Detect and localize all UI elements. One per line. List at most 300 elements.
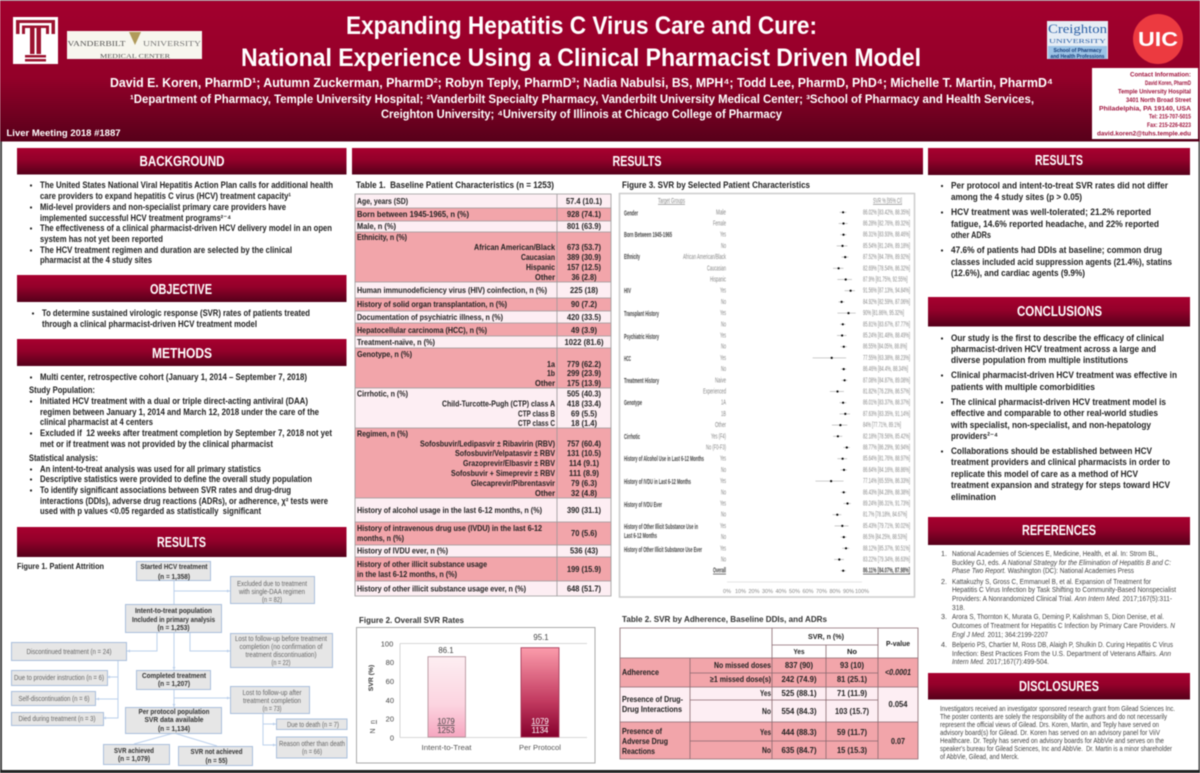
table 1: baseline patient characteristics: Hispanic [526,263,555,272]
icon: UIC logo [1133,14,1183,64]
table 2: SVR by adherence, DDIs, ADRs: 71 (11.9) [837,689,867,698]
table 2: SVR by adherence, DDIs, ADRs: 242 (74.9) [782,675,817,684]
forest plot: SVR by patient characteristics: Yes [720,545,726,552]
bar: per protocol: 1079 [531,717,549,726]
box: per protocol population: (n = 1,134) [158,724,191,733]
forest plot: SVR by patient characteristics: Transplant History [624,309,659,318]
axis: 90% [843,589,854,595]
forest plot: SVR by patient characteristics: 86.5% [84.25%, 88.53%] [863,534,907,541]
axis: 20% [748,589,760,595]
panel: references: 318. [952,603,965,612]
box: completed treatment [136,670,210,690]
table 2: SVR by adherence, DDIs, ADRs: <0.0001 [885,668,911,677]
table 1: baseline patient characteristics: CTP class C [518,419,555,428]
box: excluded [230,576,314,604]
box: provider instruction [12,670,108,686]
forest plot: SVR by patient characteristics: 84.92% [82.59%, 87.06%] [863,299,910,306]
panel: results right: HCV treatment was well-tolerated; 21.2% reported [951,207,1151,218]
contact information box [1092,68,1198,139]
table 2: SVR by adherence, DDIs, ADRs: Presence of Drug- [622,695,683,704]
panel: methods: interactions (DDIs), adverse drug reactions (ADRs), or adherence, χ² tests were [40,496,328,506]
table 1: baseline patient characteristics: 299 (23.9) [567,369,601,378]
bar: per protocol [519,633,561,752]
table 1: baseline patient characteristics: 79 (6.3) [571,479,597,488]
bar chart: overall SVR rates: n [370,720,377,724]
bar chart: overall SVR rates: 60 [386,677,394,686]
bar chart: overall SVR rates: N [370,728,377,734]
forest plot: SVR by patient characteristics: African American/Black [683,254,726,261]
forest plot: SVR by patient characteristics: Yes [720,355,726,362]
box: intent-to-treat population: (n = 1,253) [158,623,190,632]
forest plot: SVR by patient characteristics: History of Other Illicit Substance Use Ever [624,545,702,554]
bar: intent-to-treat [422,646,472,752]
table 1: baseline patient characteristics: Caucasian [521,253,555,262]
forest plot: SVR by patient characteristics: 87.63% [83.35%, 91.14%] [863,411,910,418]
table 2: SVR by adherence, DDIs, ADRs: Presence of [622,727,662,736]
forest plot: SVR by patient characteristics: No [721,299,726,306]
box: excluded: with single-DAA regimen [238,587,305,596]
table 1: baseline patient characteristics: 90 (7.2) [571,300,597,309]
panel: conclusions: providers²⁻⁴ [951,431,998,442]
forest plot: SVR by patient characteristics: Experienced [703,388,726,396]
table 1: baseline patient characteristics: 18 (1.4) [571,419,597,428]
panel: methods: Excluded if 12 weeks after treatment completion by September 7, 2018 not yet [40,428,332,438]
forest plot: SVR by patient characteristics: 1B [721,411,726,418]
table 2: SVR by adherence, DDIs, ADRs: Yes [760,689,771,698]
table 1: baseline patient characteristics: Glecaprevir/Pibrentasvir [471,479,556,488]
panel: disclosures: of AbbVie, Gilead, and Merck. [940,752,1019,761]
panel: references: REFERENCES [1022,523,1096,539]
table 2: SVR by adherence, DDIs, ADRs: ≥1 missed dose(s) [710,675,771,684]
forest plot: SVR by patient characteristics: Ethnicity [624,252,640,261]
bar chart: overall SVR rates: SVR (%) [368,665,375,691]
bar: per protocol: 1134 [532,726,549,735]
box: due to death [276,719,347,730]
forest plot: SVR by patient characteristics: 86.11% [84.07%, 87.98%] [863,566,910,575]
panel: disclosures: Healthcare. Dr. Teply has served on advisory boards for AbbVie and serves on the [940,736,1164,745]
panel: references: Providers: A Nonrandomized Clinical Trial. Ann Intern Med. 2017;167(5):311- [952,594,1173,603]
table 1: baseline patient characteristics: 157 (12.5) [567,263,601,272]
table 2: SVR by adherence, DDIs, ADRs: 444 (88.3) [782,728,817,737]
box: lost before completion: Lost to follow-up before treatment [235,634,327,643]
panel: results right [928,148,1190,279]
forest plot: SVR by patient characteristics: Hispanic [710,276,726,284]
forest plot: SVR by patient characteristics: 86.46% [84.4%, 88.34%] [863,366,908,373]
panel: references: Phase Two Report. Washington (DC): National Academies Press [952,566,1134,575]
panel: conclusions: with specialist, non-specialist, and non-hepatology [950,420,1152,431]
table 1: baseline patient characteristics: Sofosbuvir/Ledipasvir ± Ribavirin (RBV) [420,440,555,448]
table 1: baseline patient characteristics: 57.4 (10.1) [566,197,602,206]
axis: 50% [789,589,800,595]
box: per protocol population [126,707,222,734]
panel: methods: Multi center, retrospective cohort (January 1, 2014 – September 7, 2018) [40,372,307,382]
forest plot: SVR by patient characteristics: HIV [624,286,631,295]
box: SVR achieved [104,744,170,764]
panel: references: Kattakuzhy S, Gross C, Emmanuel B, et al. Expansion of Treatment for [952,577,1152,586]
panel: references: Buckley GJ, eds. A National Strategy for the Elimination of Hepatitis B and C: [952,558,1171,567]
forest plot: SVR by patient characteristics: Cirrhotic [624,432,640,441]
box: started treatment: Started HCV treatment [140,562,208,571]
icon: Vanderbilt University Medical Center logo: VANDERBILT [68,39,126,48]
table 2: SVR by adherence, DDIs, ADRs: SVR, n (%) [808,632,844,641]
table 1: baseline patient characteristics: Other [535,273,556,282]
forest plot: SVR by patient characteristics: Yes [720,310,726,317]
forest plot: SVR by patient characteristics: No (F0-F3) [706,444,726,452]
table 2: SVR by adherence, DDIs, ADRs: 93 (10) [840,661,864,670]
title [241,12,921,72]
panel: methods: met or if treatment was not provided by the clinical pharmacist [40,439,273,449]
panel: conclusions: treatment providers and clinical pharmacists in order to [951,457,1170,468]
axis [723,582,869,595]
contact information box: Fax: 215-226-8223 [1147,122,1191,129]
box: SVR not achieved: (n = 55) [206,756,228,765]
forest plot: SVR by patient characteristics: No [721,489,726,496]
forest plot: SVR by patient characteristics: Yes (F4) [711,433,726,440]
panel: results center [352,148,923,763]
bar chart: overall SVR rates: 100 [381,640,393,648]
table 1: baseline patient characteristics: History of intravenous drug use (IVDU) in the last 6-12 [357,524,542,533]
title: Expanding Hepatitis C Virus Care and Cure: [346,12,817,40]
bar: per protocol: 95.1 [533,633,549,642]
table 2: SVR by adherence, DDIs, ADRs: No [762,707,771,716]
bar: intent-to-treat: 1079 [437,717,455,726]
panel: disclosures: represent the official views of Gilead. Drs. Koren, Martin, and Teply have served on [940,720,1159,729]
panel: background: system has not yet been reported [40,234,163,244]
box: lost after completion [230,686,310,714]
table 1: baseline patient characteristics: History of IVDU ever, n (%) [357,546,448,556]
bar: intent-to-treat: Intent-to-Treat [422,743,472,752]
forest plot: SVR by patient characteristics: 88.77% [86.29%, 90.94%] [863,444,910,452]
axis: 80% [829,589,841,595]
heading: figure 1: Figure 1. Patient Attrition [17,561,104,571]
panel: methods: An intent-to-treat analysis was used for all primary statistics [40,464,261,474]
panel: objective: To determine sustained virologic response (SVR) rates of patients treated [42,308,310,318]
table 1: baseline patient characteristics: 69 (5.5) [571,410,597,418]
forest plot: SVR by patient characteristics: Male [716,209,726,216]
table 1: baseline patient characteristics: 175 (13.9) [567,379,601,388]
box: SVR not achieved [178,746,252,766]
icon: Creighton University logo [1047,21,1108,60]
forest plot: SVR by patient characteristics: Yes [720,288,726,295]
box: died: Died during treatment (n = 3) [18,714,96,723]
forest plot: SVR by patient characteristics: No [721,556,726,564]
forest plot: SVR by patient characteristics: 86.43% [84.28%, 88.38%] [863,489,910,496]
forest plot: SVR by patient characteristics: 77.55% [63.38%, 88.23%] [863,355,910,362]
authors and affiliations [110,75,1053,121]
box: lost before completion: (n = 22) [272,658,290,667]
flowchart: patient attrition [12,562,347,766]
table 1: baseline patient characteristics: 757 (60.4) [567,440,601,448]
table 1: baseline patient characteristics: Child-Turcotte-Pugh (CTP) class A [442,400,555,408]
table 2: SVR by adherence, DDIs, ADRs [620,628,918,759]
box: SVR achieved: SVR achieved [114,746,154,755]
table 1: baseline patient characteristics: Treatment-naïve, n (%) [357,338,435,347]
table 2: SVR by adherence, DDIs, ADRs: Yes [760,728,771,737]
table 2: SVR by adherence, DDIs, ADRs: 15 (15.3) [837,746,867,755]
panel: methods: To identify significant associations between SVR rates and drug-drug [40,485,291,495]
forest plot: SVR by patient characteristics: Last 6-12 Months [624,531,657,540]
panel: references: Infection: Best Practices From the U.S. Department of Veterans Affairs. Ann [952,649,1171,658]
box: provider instruction: Due to provider instruction (n = 6) [14,673,104,682]
panel: methods: Descriptive statistics were provided to define the overall study population [40,474,312,484]
forest plot: SVR by patient characteristics: SVR % [95% CI] [873,198,902,205]
heading: table 1: Table 1. Baseline Patient Characteristics (n = 1253) [356,180,554,190]
table 2: SVR by adherence, DDIs, ADRs: 59 (11.7) [837,728,867,737]
table 1: baseline patient characteristics: 801 (63.9) [567,222,601,231]
panel: methods: METHODS [152,346,212,362]
forest plot: SVR by patient characteristics: No [721,243,726,250]
icon: UIC logo: UIC [1138,29,1178,51]
panel: results right: fatigue, 14.6% reported headache, and 22% reported [951,219,1159,230]
table 2: SVR by adherence, DDIs, ADRs: Reactions [622,747,655,756]
forest plot: SVR by patient characteristics: 88.12% [85.37%, 90.51%] [863,545,910,552]
panel: methods: Statistical analysis: [29,453,98,463]
icon: Creighton University logo: Creighton [1048,21,1108,36]
table 1: baseline patient characteristics: 1a [547,360,555,369]
authors and affiliations: ¹Department of Pharmacy, Temple University Hospital; ²Vanderbilt Specialty Pharmacy, Vanderbilt University Medical Center; ³School of Pharmacy and Health Services, [130,94,1034,106]
box: per protocol population: Per protocol population [138,707,210,716]
panel: conclusions: replicate this model of care as a method of HCV [951,469,1139,480]
table 1: baseline patient characteristics: 49 (3.9) [571,326,597,335]
meeting tag: Liver Meeting 2018 #1887 [6,128,121,138]
box: reason other than death [276,737,347,758]
forest plot: SVR by patient characteristics: Treatment History [624,376,659,385]
axis: 10% [735,589,746,595]
panel: results right: Per protocol and intent-to-treat SVR rates did not differ [951,181,1168,192]
table 1: baseline patient characteristics: Hepatocellular carcinoma (HCC), n (%) [357,326,487,335]
bar chart: overall SVR rates [356,628,595,763]
table 1: baseline patient characteristics: Ethnicity, n (%) [357,233,407,242]
panel: references: Intern Med. 2017;167(7):499-504. [952,657,1049,666]
table 1: baseline patient characteristics: 418 (33.4) [567,400,601,408]
panel: disclosures [928,673,1190,761]
table 1: baseline patient characteristics: 928 (74.1) [567,210,601,219]
heading: table 2: Table 2. SVR by Adherence, Baseline DDIs, and ADRs [622,614,827,624]
panel: results right: (12.6%), and cardiac agents (9.9%) [951,268,1085,279]
panel: conclusions: diverse population from multiple institutions [951,355,1128,366]
authors and affiliations: Creighton University; ⁴University of Illinois at Chicago College of Pharmacy [381,109,783,121]
forest plot: SVR by patient characteristics: No [721,321,726,328]
table 2: SVR by adherence, DDIs, ADRs: 103 (15.7) [835,707,869,716]
forest plot: SVR by patient characteristics: 90% [81.86%, 95.32%] [863,310,904,317]
table 1: baseline patient characteristics: History of other illicit substance usage ever, n (%) [357,584,526,594]
box: due to death: Due to death (n = 7) [287,720,339,729]
table 2: SVR by adherence, DDIs, ADRs: No missed doses [714,661,771,670]
panel: disclosures: advisory board(s) for Gilead. Dr. Koren has served on an advisory panel for ViiV [940,728,1160,737]
forest plot: SVR by patient characteristics: Yes [720,500,726,508]
forest plot: SVR by patient characteristics: Yes [720,232,726,239]
heading: figure 3: Figure 3. SVR by Selected Patient Characteristics [622,180,810,190]
panel: results right: other ADRs [951,230,991,241]
table 1: baseline patient characteristics: History of other illicit substance usage [357,560,487,569]
table 1: baseline patient characteristics: 70 (5.6) [571,529,597,538]
panel: references: Belperio PS, Chartier M, Ross DB, Alaigh P, Shulkin D. Curing Hepatitis C Virus [952,640,1173,649]
panel: conclusions: treatment expansion and strategy for steps toward HCV [951,480,1171,491]
table 1: baseline patient characteristics [355,194,611,596]
contact information box: 3401 North Broad Street [1126,97,1191,104]
forest plot: SVR by patient characteristics: 85.43% [79.71%, 90.02%] [863,523,910,530]
panel: background: The United States National Viral Hepatitis Action Plan calls for additional health [40,180,333,190]
panel: methods: clinical pharmacist at 4 centers [40,417,153,427]
bar: intent-to-treat: 86.1 [438,646,454,655]
forest plot: SVR by patient characteristics: Genotype [624,398,642,407]
panel: results right: 47.6% of patients had DDIs at baseline; common drug [951,245,1162,256]
table 1: baseline patient characteristics: 536 (43) [570,546,598,556]
axis: 40% [775,589,787,595]
table 1: baseline patient characteristics: Sofosbuvir/Velpatasvir ± RBV [455,449,555,458]
icon: Creighton University logo: and Health Professions [1050,54,1105,60]
box: discontinued [12,642,126,660]
table 2: SVR by adherence, DDIs, ADRs: 0.07 [891,737,905,746]
panel: methods: regimen between January 1, 2014 and March 12, 2018 under the care of the [40,407,319,417]
table 1: baseline patient characteristics: 199 (15.9) [567,565,601,574]
table 1: baseline patient characteristics: 390 (31.1) [567,506,601,515]
panel: references: Arora S, Thornton K, Murata G, Deming P, Kalishman S, Dion Denise, et al. [952,612,1164,621]
forest plot: SVR by patient characteristics: 86.64% [84.16%, 88.86%] [863,467,910,474]
table 1: baseline patient characteristics: 131 (10.5) [567,449,601,458]
panel: objective: through a clinical pharmacist-driven HCV treatment model [42,319,257,329]
authors and affiliations: David E. Koren, PharmD¹; Autumn Zuckerman, PharmD²; Robyn Teply, PharmD³; Nadia Nabulsi, BS, MPH⁴; Todd Lee, PharmD, PhD⁴; Michelle T. Martin, PharmD⁴ [110,75,1053,90]
panel: conclusions: The clinical pharmacist-driven HCV treatment model is [951,397,1166,408]
forest plot: SVR by patient characteristics: Psychiatric History [624,332,659,341]
box: intent-to-treat population: Included in primary analysis [132,615,215,624]
bar chart: overall SVR rates: 80 [386,658,394,667]
panel: conclusions [928,297,1190,503]
table 1: baseline patient characteristics: Regimen, n (%) [357,430,408,438]
panel: references: 2. [941,577,947,586]
axis: 60% [802,589,814,595]
box: self-discontinuation: Self-discontinuation (n = 6) [18,694,90,703]
table 2: SVR by adherence, DDIs, ADRs: 554 (84.3) [782,707,817,716]
forest plot: SVR by patient characteristics: 86.01% [83.37%, 88.37%] [863,400,910,407]
panel: background: pharmacist at the 4 study sites [40,255,152,265]
panel: results left [12,527,347,766]
table 2: SVR by adherence, DDIs, ADRs: 81 (25.1) [837,675,867,684]
forest plot: SVR by patient characteristics: 91.56% [87.13%, 94.84%] [863,288,910,295]
table 1: baseline patient characteristics: African American/Black [474,243,555,252]
table 1: baseline patient characteristics: months, n (%) [357,534,404,543]
box: intent-to-treat population: Intent-to-treat population [135,606,212,615]
table 2: SVR by adherence, DDIs, ADRs: 525 (88.1) [782,689,817,698]
forest plot: SVR by patient characteristics: Gender [624,208,638,218]
box: SVR achieved: (n = 1,079) [118,754,151,763]
forest plot: SVR by patient characteristics: Other [715,422,726,429]
heading: figure 2: Figure 2. Overall SVR Rates [359,615,464,625]
box: SVR not achieved: SVR not achieved [190,747,242,756]
forest plot: SVR by patient characteristics: Yes [720,523,726,530]
forest plot: SVR by patient characteristics: 83.22% [79.34%, 86.63%] [863,556,910,564]
panel: results center: RESULTS [612,154,662,170]
contact information box: Temple University Hospital [1118,88,1191,96]
panel: results right: RESULTS [1035,153,1083,169]
panel: objective [17,275,346,329]
header banner [0,0,1200,142]
table 2: SVR by adherence, DDIs, ADRs: Adherence [622,668,659,677]
forest plot: SVR by patient characteristics: 84% [77.71%, 89.1%] [863,422,901,429]
bar: per protocol: Per Protocol [519,743,561,752]
bar: intent-to-treat: 1253 [437,726,455,735]
table 2: SVR by adherence, DDIs, ADRs: Drug Interactions [622,705,682,714]
panel: background: care providers to expand hepatitis C virus (HCV) treatment capacity¹ [40,191,291,201]
box: excluded: Excluded due to treatment [237,579,307,588]
table 1: baseline patient characteristics: 114 (9.1) [569,459,599,468]
table 1: baseline patient characteristics: Other [535,489,556,498]
forest plot: SVR by patient characteristics: No [721,344,726,351]
panel: conclusions: Collaborations should be established between HCV [951,446,1153,457]
panel: conclusions: pharmacist-driven HCV treatment across a large and [951,344,1156,355]
box: excluded: (n = 82) [262,595,282,604]
forest plot: SVR by patient characteristics: Yes [720,456,726,463]
table 1: baseline patient characteristics: 673 (53.7) [567,243,601,252]
box: started treatment: (n = 1,358) [158,572,191,581]
forest plot: SVR by patient characteristics: 1A [721,400,726,407]
panel: background: BACKGROUND [140,154,224,170]
box: lost after completion: (n = 73) [262,704,282,713]
panel: references: 1. [941,549,947,558]
table 1: baseline patient characteristics: 225 (18) [570,286,598,295]
table 1: baseline patient characteristics: Cirrhotic, n (%) [357,390,408,398]
table 1: baseline patient characteristics: Human immunodeficiency virus (HIV) coinfection, n (%) [357,286,547,295]
bar chart: overall SVR rates: 0 [390,734,394,742]
panel: methods: Initiated HCV treatment with a dual or triple direct-acting antiviral (DAA) [40,396,308,406]
forest plot: SVR by patient characteristics: Yes [720,332,726,340]
panel: references: 4. [941,640,947,649]
table 1: baseline patient characteristics: 1022 (81.6) [564,338,604,347]
table 1: baseline patient characteristics: Other [535,379,556,388]
icon: Creighton University logo: School of Pharmacy [1054,48,1102,54]
panel: conclusions: elimination [951,492,996,503]
axis: 0% [723,589,731,595]
forest plot: SVR by patient characteristics: 85.54% [81.24%, 89.18%] [863,243,910,250]
panel: references: 3. [941,612,947,621]
panel: background: implemented successful HCV treatment programs²⁻⁴ [40,213,231,223]
table 1: baseline patient characteristics: in the last 6-12 months, n (%) [357,570,457,579]
forest plot: SVR by patient characteristics: 82.69% [78.54%, 86.32%] [863,265,910,272]
table 2: SVR by adherence, DDIs, ADRs: No [762,746,771,755]
table 1: baseline patient characteristics: 32 (4.8) [571,489,597,498]
icon: Vanderbilt University Medical Center logo: UNIVERSITY [143,40,201,48]
forest plot: SVR by patient characteristics: Born Between 1945-1965 [624,230,672,239]
forest plot: SVR by patient characteristics: 86.31% [83.93%, 88.46%] [863,232,910,239]
panel: results left: RESULTS [157,535,206,551]
table 1: baseline patient characteristics: Genotype, n (%) [357,350,412,359]
panel: references: Engl J Med. 2011; 364:2199-2207 [952,630,1048,639]
contact information box: Tel: 215-707-5015 [1149,114,1191,120]
forest plot: SVR by patient characteristics: No [721,512,726,519]
table 2: SVR by adherence, DDIs, ADRs: 837 (90) [785,661,813,670]
table 1: baseline patient characteristics: History of alcohol usage in the last 6-12 months, n (%) [357,506,542,515]
contact information box: Contact Information: [1130,72,1191,78]
table 1: baseline patient characteristics: 36 (2.8) [572,273,597,282]
table 1: baseline patient characteristics: Age, years (SD) [357,197,408,206]
table 1: baseline patient characteristics: 111 (8.9) [569,469,599,478]
forest plot: SVR by patient characteristics: Naive [715,377,726,384]
table 1: baseline patient characteristics: CTP class B [518,410,555,418]
forest plot: SVR by patient characteristics: HCC [624,354,631,363]
table 1: baseline patient characteristics: Documentation of psychiatric illness, n (%) [357,313,503,322]
panel: conclusions: CONCLUSIONS [1017,304,1102,320]
panel: references: National Academies of Sciences E, Medicine, Health, et al. In: Strom BL, [952,549,1158,558]
forest plot: SVR by patient characteristics: No [721,467,726,474]
icon: Vanderbilt University Medical Center logo [67,31,202,60]
forest plot: SVR by patient characteristics: 85.24% [81.48%, 88.49%] [863,332,910,340]
contact information box: Philadelphia, PA 19140, USA [1099,106,1192,112]
table 1: baseline patient characteristics: 420 (33.5) [567,313,601,322]
panel: references: Outcomes of Treatment for Hepatitis C Infection by Primary Care Providers. N [952,621,1176,630]
panel: methods: used with p values <0.05 regarded as statistically significant [40,506,261,516]
table 1: baseline patient characteristics: Male, n (%) [357,222,396,231]
table 1: baseline patient characteristics: History of solid organ transplantation, n (%) [357,300,507,309]
